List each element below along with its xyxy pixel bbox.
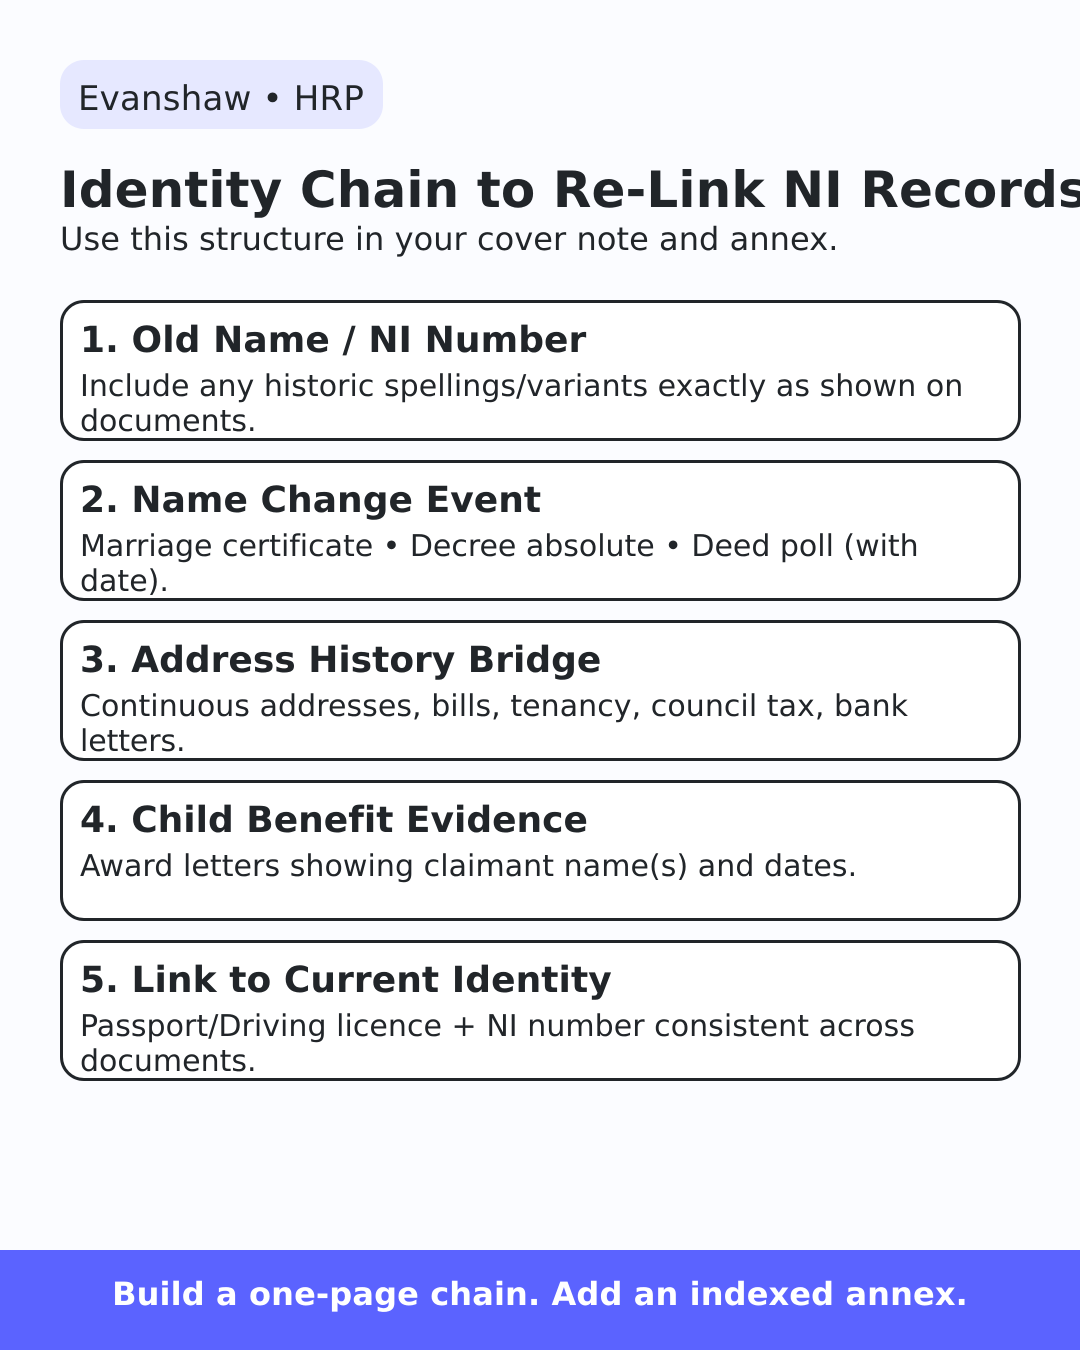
panel: step 4 [60, 780, 1021, 921]
panel: step 3 [60, 620, 1021, 761]
step 5 heading: 5. Link to Current Identity [80, 960, 612, 1001]
panel: step 2 [60, 460, 1021, 601]
step 2 text: Marriage certificate • Decree absolute • Deed poll (with [80, 529, 919, 564]
badge: Evanshaw HRP [60, 60, 383, 129]
step 1 text: documents. [80, 404, 257, 439]
step 3 text: letters. [80, 724, 185, 759]
step 3 heading: 3. Address History Bridge [80, 640, 601, 681]
step 5 text: documents. [80, 1044, 257, 1079]
panel: step 1 [60, 300, 1021, 441]
step 5 text [80, 1009, 915, 1079]
step 4 text: Award letters showing claimant name(s) and dates. [80, 849, 857, 884]
step 2 text [80, 529, 919, 599]
step 4 heading: 4. Child Benefit Evidence [80, 800, 588, 841]
step 1 text [80, 369, 963, 439]
step 1 heading: 1. Old Name / NI Number [80, 320, 586, 361]
footer text: Build a one-page chain. Add an indexed annex. [112, 1275, 968, 1313]
step 3 text [80, 689, 908, 759]
footer banner [0, 1250, 1080, 1350]
step 5 text: Passport/Driving licence + NI number consistent across [80, 1009, 915, 1044]
panel: step 5 [60, 940, 1021, 1081]
step 2 heading: 2. Name Change Event [80, 480, 541, 521]
step 2 text: date). [80, 564, 169, 599]
step 1 text: Include any historic spellings/variants exactly as shown on [80, 369, 963, 404]
badge label: Evanshaw • HRP [78, 79, 364, 119]
step 3 text: Continuous addresses, bills, tenancy, council tax, bank [80, 689, 908, 724]
subtitle: Use this structure in your cover note and annex. [60, 220, 838, 258]
title: Identity Chain to Re-Link NI Records [60, 161, 1080, 219]
